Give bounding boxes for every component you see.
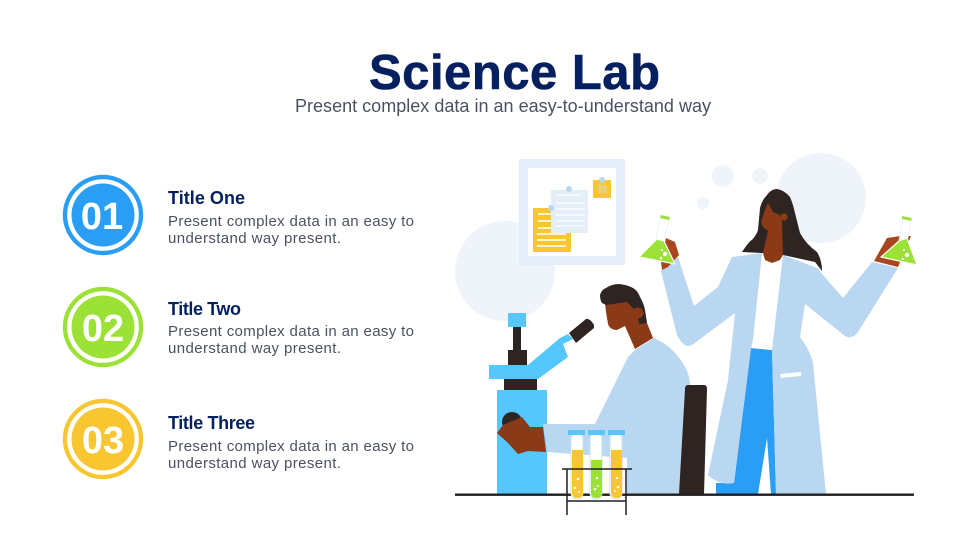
flask: left hand	[639, 215, 679, 270]
heading: title three: Title Three	[168, 413, 255, 433]
badge 03: 03	[82, 420, 124, 462]
text: description three: Present complex data in an easy to	[168, 438, 414, 455]
badge 01: 01	[81, 196, 123, 238]
badge 03	[65, 401, 141, 477]
scientist: woman	[661, 189, 898, 494]
badge 01	[65, 177, 141, 253]
text: description three: understand way present.	[168, 455, 341, 472]
heading: title two: Title Two	[168, 299, 241, 319]
text: description two: Present complex data in an easy to	[168, 323, 414, 340]
trousers	[716, 348, 776, 494]
text: description two: understand way present.	[168, 340, 341, 357]
scientist: man	[497, 284, 690, 494]
chair	[679, 385, 707, 494]
badge 02: 02	[82, 308, 124, 350]
lab coat	[661, 253, 762, 484]
shirt	[751, 255, 783, 350]
heading: title one: Title One	[168, 188, 245, 208]
subtitle: Present complex data in an easy-to-understand way	[295, 96, 711, 116]
title: Science Lab	[369, 46, 660, 100]
badge 02	[65, 289, 141, 365]
text: description one: Present complex data in an easy to	[168, 213, 414, 230]
notice board	[519, 159, 625, 265]
flask: right hand	[874, 216, 917, 267]
item two	[65, 289, 414, 365]
illustration: science lab	[455, 153, 917, 515]
test tubes in rack	[562, 430, 632, 515]
background circles	[455, 153, 866, 321]
text: description two	[168, 323, 414, 357]
item one	[65, 177, 414, 253]
text: description one: understand way present.	[168, 230, 341, 247]
microscope	[489, 313, 594, 494]
item three	[65, 401, 414, 477]
text: description three	[168, 438, 414, 472]
hair	[742, 189, 822, 271]
face and neck	[761, 203, 783, 263]
text: description one	[168, 213, 414, 247]
bench line	[455, 494, 914, 496]
